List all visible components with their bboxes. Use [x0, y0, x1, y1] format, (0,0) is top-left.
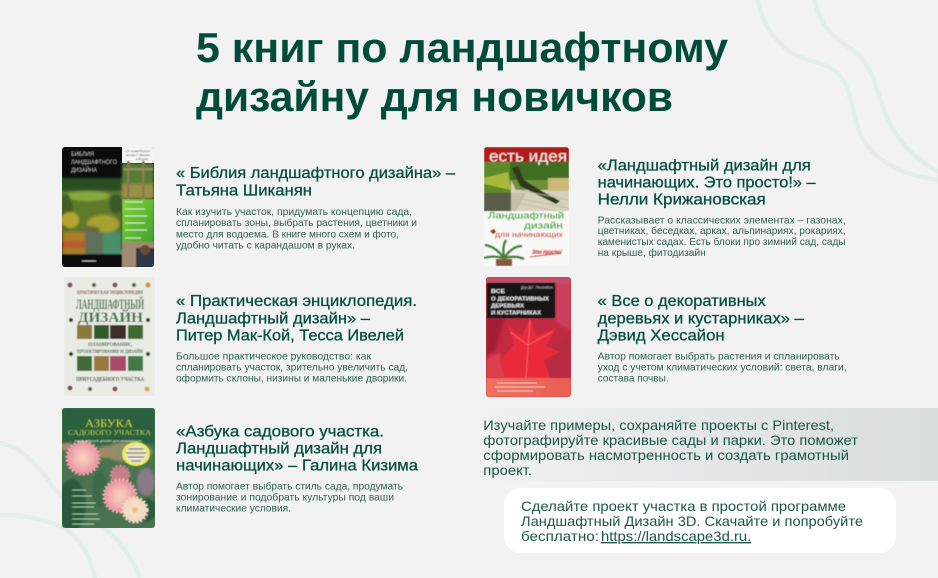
book title: Дэвид Хессайон	[598, 328, 725, 345]
book description	[176, 207, 417, 252]
book title: начинающих. Это просто!» –	[598, 174, 816, 191]
panel: book 2	[64, 277, 417, 396]
book cover: Практическая энциклопедия	[64, 277, 155, 396]
book description: состава почвы.	[598, 374, 669, 385]
book cover: Библия ландшафтного дизайна: методах Т. Шиканян	[126, 153, 150, 157]
callout: program link card: Сделайте проект участка в простой программе	[521, 499, 846, 514]
book description: Автор помогает выбрать стиль сада, продумать	[176, 480, 403, 492]
book cover: Ландшафтный дизайн для начинающих: для начинающих	[495, 230, 563, 239]
book description: цветниках, беседках, арках, альпинариях, рокариях,	[598, 225, 846, 237]
book cover: Практическая энциклопедия: ПРОЕКТИРОВАНИЕ И ДИЗАЙН	[77, 347, 144, 355]
book title: начинающих» – Галина Кизима	[176, 458, 418, 475]
book description	[598, 215, 846, 259]
book title	[598, 293, 804, 345]
book cover: Библия ландшафтного дизайна: О новейших	[126, 149, 151, 153]
book description: климатические условия.	[176, 504, 291, 515]
book cover: Библия ландшафтного дизайна: ЛАНДШАФТНОГО	[71, 160, 117, 166]
book cover: Практическая энциклопедия: ПРИУСАДЕБНОГО УЧАСТКА	[76, 377, 145, 383]
book title: « Библия ландшафтного дизайна» –	[176, 165, 455, 182]
book cover: Ландшафтный дизайн для начинающих	[484, 147, 569, 266]
book description: уход с учетом климатических условий: света, влаги,	[598, 363, 847, 374]
book cover: Азбука садового участка: ландшафтный дизайн для начинающих	[74, 439, 142, 443]
book title: Нелли Крижановская	[598, 192, 766, 209]
book cover: Все о декоративных деревьях: ДЕРЕВЬЯХ	[491, 304, 524, 310]
callout: program link card: https://landscape3d.ru.	[601, 529, 751, 544]
callout: program link card: бесплатно:	[521, 529, 599, 544]
book cover: Все о декоративных деревьях: И КУСТАРНИКАХ	[491, 310, 541, 316]
book cover: Библия ландшафтного дизайна: ДИЗАЙНА	[71, 166, 97, 174]
book description: зонирование и подобрать культуры под ваши	[176, 492, 394, 504]
book cover: Практическая энциклопедия: ПЛАНИРОВАНИЕ,	[88, 342, 133, 348]
title: 5 книг по ландшафтному	[196, 24, 729, 71]
callout: advice band	[475, 408, 938, 481]
book title	[176, 424, 418, 475]
background curves bottom left	[0, 443, 140, 578]
title	[196, 24, 729, 120]
book description	[598, 350, 847, 385]
book title	[176, 165, 455, 200]
book description: удобно читать с карандашом в руках.	[176, 240, 355, 252]
book title: Питер Мак-Кой, Тесса Ивелей	[176, 328, 404, 345]
panel: book 4	[484, 147, 846, 266]
panel: book 3	[58, 408, 418, 531]
callout: advice band: сформировать насмотренность и создать грамотный	[483, 448, 849, 463]
book description: спланировать зоны, выбрать растения, цветники и	[176, 217, 417, 229]
book title: Татьяна Шиканян	[176, 182, 312, 200]
book title: Ландшафтный дизайн» –	[176, 310, 370, 327]
book cover: Практическая энциклопедия: ЛАНДШАФТНЫЙ	[76, 296, 144, 313]
book description: место для водоема. В книге много схем и фото,	[176, 228, 399, 240]
book cover: Практическая энциклопедия: ПРАКТИЧЕСКАЯ ЭНЦИКЛОПЕДИЯ	[77, 290, 143, 296]
book description: Большое практическое руководство: как	[176, 351, 372, 362]
book cover: Практическая энциклопедия: ДИЗАЙН	[78, 309, 143, 326]
book cover: Ландшафтный дизайн для начинающих: дизайн	[524, 220, 563, 232]
book cover: Все о декоративных деревьях: ВСЕ	[491, 289, 505, 295]
background curves top right	[758, 0, 938, 180]
book title: « Все о декоративных	[598, 293, 766, 310]
book cover: Азбука садового участка: АЗБУКА	[85, 416, 133, 430]
book title: «Ландшафтный дизайн для	[598, 158, 811, 175]
callout: advice band: проект.	[483, 463, 532, 478]
callout: program link card	[504, 488, 896, 553]
book title	[598, 158, 816, 209]
book cover: Все о декоративных деревьях: О ДЕКОРАТИВНЫХ	[491, 296, 549, 302]
book cover: Библия ландшафтного дизайна: в России	[136, 157, 148, 161]
book cover: Библия ландшафтного дизайна: БИБЛИЯ	[71, 152, 94, 158]
book cover: Ландшафтный дизайн для начинающих: есть идея	[489, 148, 567, 166]
book title: деревьях и кустарниках» –	[598, 310, 804, 327]
book cover: Азбука садового участка	[58, 408, 157, 531]
panel: book 5	[486, 277, 847, 397]
panel: book 1	[59, 147, 455, 267]
book description: Как изучить участок, придумать концепцию сада,	[176, 207, 412, 218]
book description	[176, 351, 408, 385]
book title: Ландшафтный дизайн для	[176, 440, 382, 457]
book description: каменистых садах. Есть блоки про зимний сад, сады	[598, 236, 846, 248]
book title: «Азбука садового участка.	[176, 424, 384, 441]
book cover: Все о декоративных деревьях: Д-р Д.Г. Хессайон	[521, 286, 553, 290]
book cover: Ландшафтный дизайн для начинающих: Это просто!	[532, 249, 563, 256]
book title: « Практическая энциклопедия.	[176, 293, 417, 310]
book cover: Все о декоративных деревьях	[486, 277, 571, 397]
book description: Рассказывает о классических элементах – газонах,	[598, 215, 846, 226]
book title	[176, 293, 417, 345]
book description: оформить склоны, низины и маленькие дворики.	[176, 373, 407, 385]
title: дизайну для новичков	[196, 73, 673, 120]
book cover: Азбука садового участка: САДОВОГО УЧАСТКА	[68, 429, 151, 437]
callout: advice band: Изучайте примеры, сохраняйте проекты с Pinterest,	[483, 418, 834, 433]
book description: спланировать участок, зрительно увеличить сад,	[176, 363, 408, 374]
book description	[176, 480, 403, 515]
book cover: Библия ландшафтного дизайна	[59, 147, 154, 267]
book description: Автор помогает выбрать растения и спланировать	[598, 350, 840, 362]
book cover: Ландшафтный дизайн для начинающих: Ландшафтный	[488, 210, 564, 222]
callout: advice band: фотографируйте красивые сады и парки. Это поможет	[483, 433, 858, 448]
callout: program link card: Ландшафтный Дизайн 3D. Скачайте и попробуйте	[521, 514, 863, 529]
book description: на крыше, фитодизайн	[598, 247, 706, 259]
